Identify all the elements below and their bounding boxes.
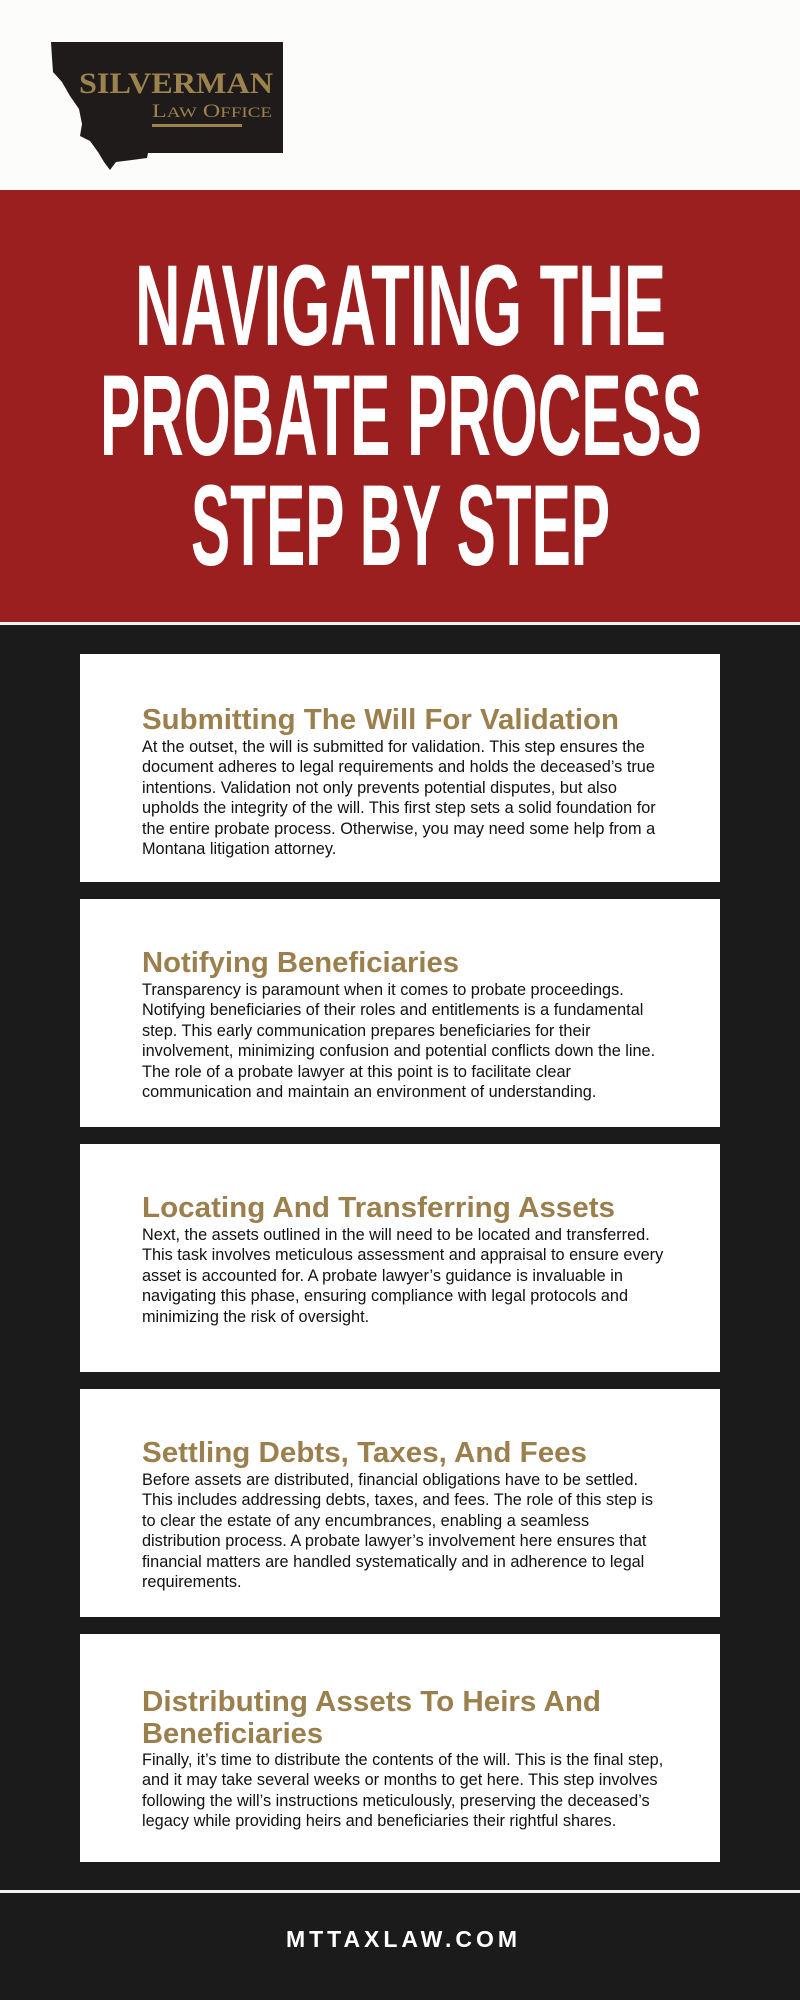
card 4: distribution process. A probate lawyer’s involvement here ensures that: [142, 1532, 646, 1550]
card 2: involvement, minimizing confusion and potential conflicts down the line.: [142, 1042, 655, 1060]
card 4: This includes addressing debts, taxes, and fees. The role of this step is: [142, 1491, 653, 1509]
card 2: Transparency is paramount when it comes to probate proceedings.: [142, 981, 624, 999]
card 1: document adheres to legal requirements and holds the deceased’s true: [142, 758, 655, 776]
card 4: to clear the estate of any encumbrances, enabling a seamless: [142, 1512, 589, 1530]
card 3: asset is accounted for. A probate lawyer’s guidance is invaluable in: [142, 1267, 623, 1285]
logo: LAW O FFICE: [152, 101, 272, 122]
card 3: Locating And Transferring Assets: [142, 1192, 615, 1224]
card 5: Beneficiaries: [142, 1718, 323, 1750]
card 1: At the outset, the will is submitted for validation. This step ensures the: [142, 738, 645, 756]
card 3: minimizing the risk of oversight.: [142, 1308, 369, 1326]
card 1: intentions. Validation not only prevents potential disputes, but also: [142, 779, 617, 797]
card 2: communication and maintain an environment of understanding.: [142, 1083, 596, 1101]
footer url: MTTAXLAW.COM: [286, 1926, 517, 1952]
card 5: following the will’s instructions meticulously, preserving the deceased’s: [142, 1792, 650, 1810]
title: [100, 242, 702, 590]
card 1: [80, 654, 720, 882]
card 1: upholds the integrity of the will. This first step sets a solid foundation for: [142, 799, 656, 817]
card 5: and it may take several weeks or months to get here. This step involves: [142, 1771, 658, 1789]
card 3: navigating this phase, ensuring compliance with legal protocols and: [142, 1287, 628, 1305]
card 4: requirements.: [142, 1573, 242, 1591]
card 5: [80, 1634, 720, 1862]
card 2: The role of a probate lawyer at this point is to facilitate clear: [142, 1063, 571, 1081]
card 1: Submitting The Will For Validation: [142, 704, 619, 736]
card 2: step. This early communication prepares beneficiaries for their: [142, 1022, 591, 1040]
card 3: Next, the assets outlined in the will need to be located and transferred.: [142, 1226, 650, 1244]
card 1: Montana litigation attorney.: [142, 840, 336, 858]
card 2: Notifying beneficiaries of their roles and entitlements is a fundamental: [142, 1001, 643, 1019]
card 4: Before assets are distributed, financial obligations have to be settled.: [142, 1471, 638, 1489]
card 5: Finally, it’s time to distribute the contents of the will. This is the final step,: [142, 1751, 663, 1769]
card 3: This task involves meticulous assessment and appraisal to ensure every: [142, 1246, 663, 1264]
card 4: Settling Debts, Taxes, And Fees: [142, 1437, 587, 1469]
card 4: financial matters are handled systematically and in adherence to legal: [142, 1553, 644, 1571]
card 1: the entire probate process. Otherwise, you may need some help from a: [142, 820, 655, 838]
logo: SILVERMAN: [79, 67, 273, 100]
logo: [51, 42, 283, 170]
card 5: Distributing Assets To Heirs And: [142, 1686, 601, 1718]
card 4: [80, 1389, 720, 1617]
card 2: Notifying Beneficiaries: [142, 947, 459, 979]
card 2: [80, 899, 720, 1127]
card 5: legacy while providing heirs and beneficiaries their rightful shares.: [142, 1812, 616, 1830]
card 3: [80, 1144, 720, 1372]
